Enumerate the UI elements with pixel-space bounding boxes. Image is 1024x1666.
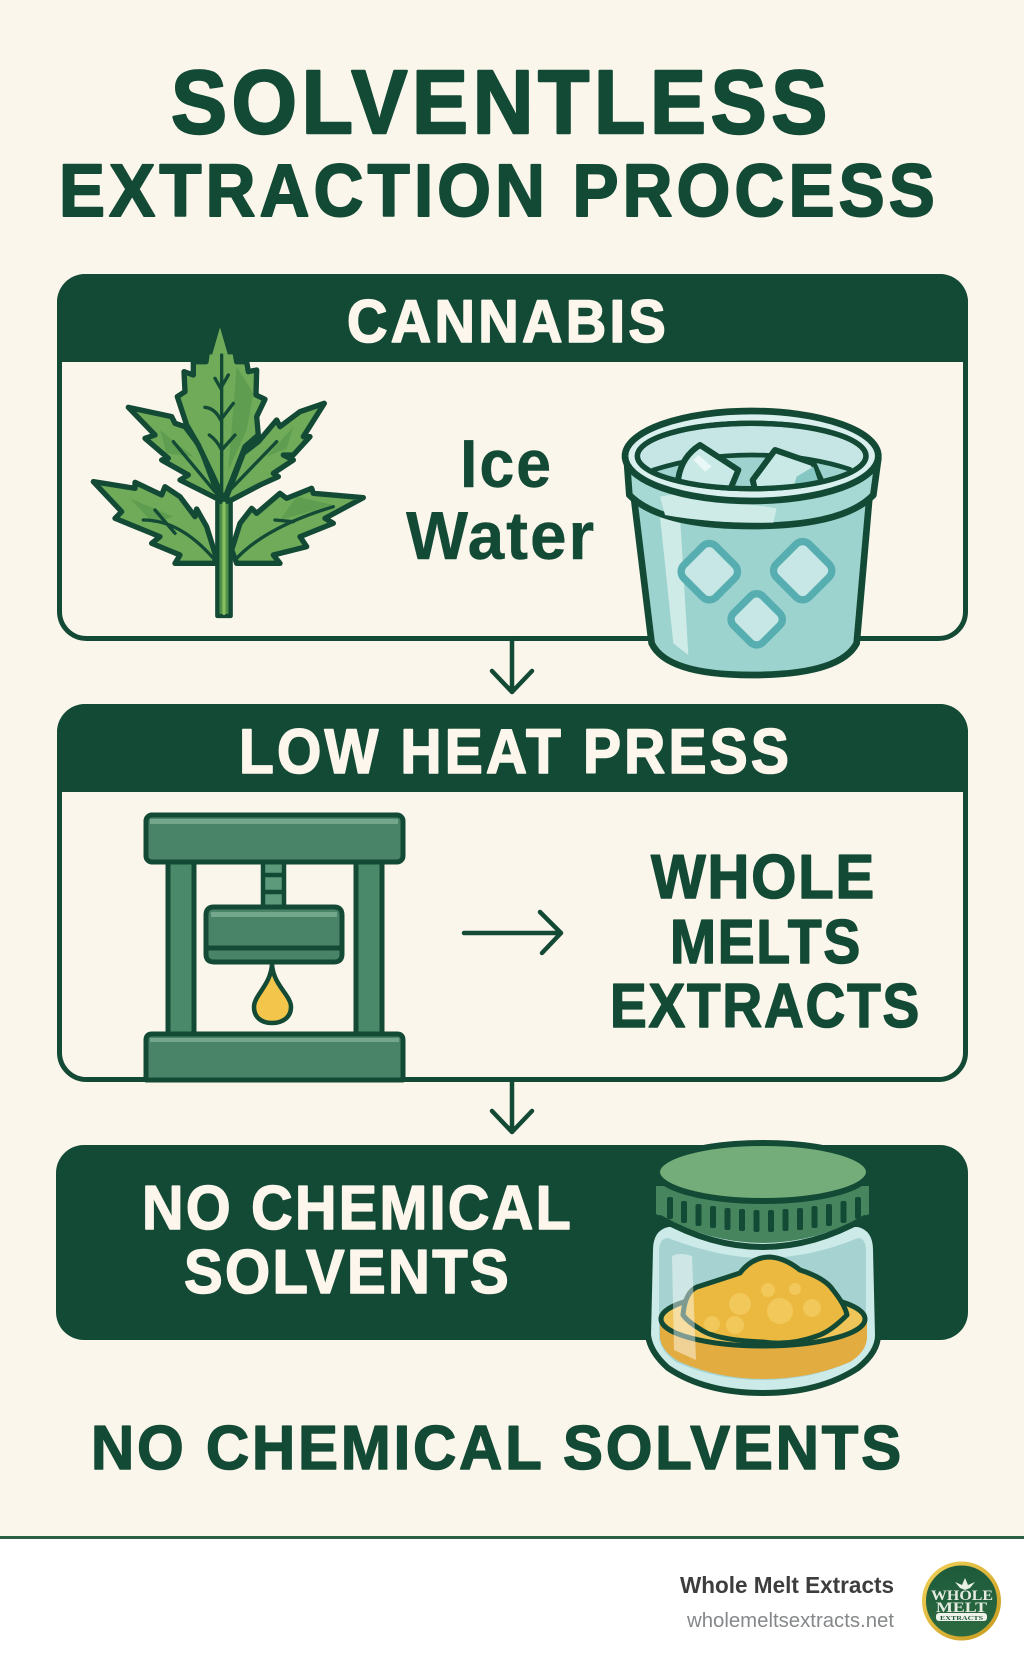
logo text (931, 1588, 993, 1616)
icon: jar of extract (648, 1143, 878, 1393)
screw (263, 860, 284, 908)
arrow: press to extract (464, 912, 561, 953)
wax mound (683, 1257, 847, 1343)
lid ribs (667, 1197, 861, 1232)
top plate (146, 815, 403, 862)
footer band (0, 1536, 1024, 1666)
press head highlight (211, 912, 337, 917)
panel header (57, 274, 968, 362)
panel outline (60, 276, 966, 638)
label: whole melts extracts (610, 843, 921, 1041)
logo banner: EXTRACTS (940, 1615, 983, 1622)
melts: MELTS (670, 908, 862, 977)
panel: no chemical solvents (56, 1143, 968, 1393)
title line 1: SOLVENTLESS (171, 53, 832, 153)
panel: low heat press (57, 704, 968, 1080)
panel background (56, 1145, 968, 1340)
oil drop (254, 964, 291, 1023)
icon: heat press (146, 815, 403, 1080)
top plate highlight (150, 819, 398, 824)
line 2: SOLVENTS (184, 1238, 511, 1307)
water: Water (406, 498, 596, 574)
footer brand (680, 1572, 894, 1632)
glass highlight (672, 1254, 696, 1360)
lid band (656, 1186, 869, 1243)
heading: low heat press: LOW HEAT PRESS (239, 717, 792, 787)
label: ice water (406, 426, 596, 574)
caption: no chemical solvents: NO CHEMICAL SOLVENTS (91, 1414, 904, 1483)
left column (168, 860, 194, 1035)
lid band lower edge (660, 1218, 865, 1247)
arrow: panel 2 to panel 3 (492, 1082, 532, 1132)
logo text: WHOLE (931, 1588, 993, 1604)
wax surface (661, 1292, 865, 1346)
jar glass (648, 1224, 878, 1393)
logo (924, 1564, 999, 1638)
bottom plate (146, 1034, 403, 1080)
jar interior (659, 1238, 866, 1380)
ice: Ice (460, 426, 553, 502)
panel: cannabis and ice water (57, 274, 968, 675)
wax base (660, 1322, 867, 1379)
brand name: Whole Melt Extracts (680, 1572, 894, 1598)
right column (356, 860, 382, 1035)
whole: WHOLE (651, 843, 876, 912)
bottom plate highlight (150, 1038, 399, 1042)
title (59, 53, 939, 232)
icon: cannabis leaf (93, 327, 363, 616)
arrow: panel 1 to panel 2 (492, 641, 532, 692)
panel text (142, 1174, 573, 1307)
brand url: wholemeltsextracts.net (686, 1610, 894, 1632)
line 1: NO CHEMICAL (142, 1174, 573, 1243)
heading: cannabis: CANNABIS (347, 288, 669, 355)
logo leaf (955, 1578, 975, 1590)
extracts: EXTRACTS (610, 972, 921, 1041)
panel header (57, 704, 968, 792)
wax mottling (704, 1283, 821, 1334)
panel outline (60, 706, 966, 1080)
press head (206, 907, 342, 962)
title line 2: EXTRACTION PROCESS (59, 149, 939, 232)
icon: bucket of ice water (625, 411, 878, 675)
lid top (657, 1143, 869, 1201)
logo text: MELT (936, 1600, 987, 1616)
